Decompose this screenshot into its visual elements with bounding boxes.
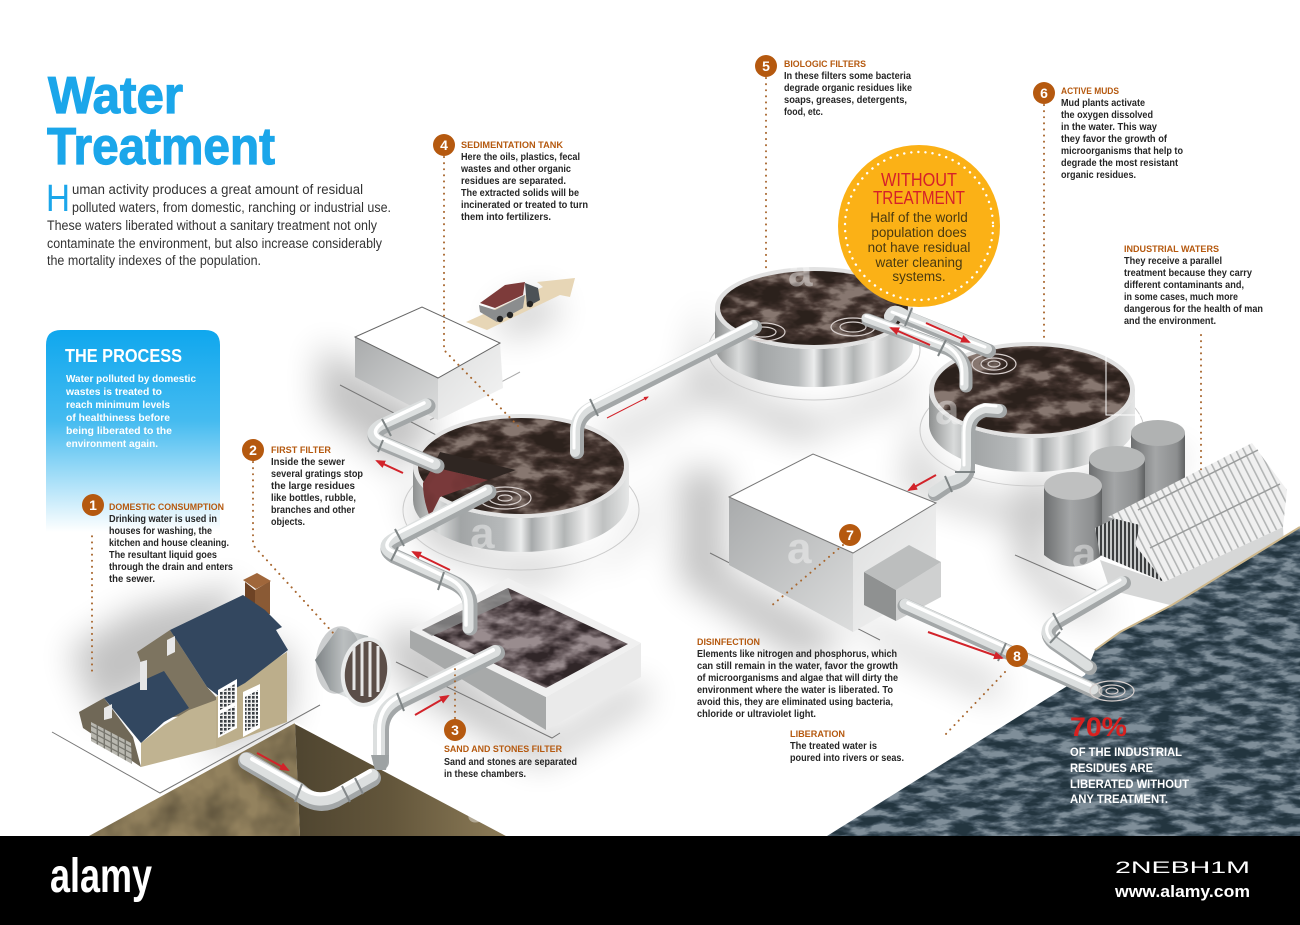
windows — [218, 679, 237, 738]
pipe: sludge extraction — [373, 403, 437, 466]
callout 1: domestic consumption — [82, 494, 233, 585]
callout: disinfection: can still remain in the water, favor the growth — [697, 661, 898, 672]
callout: industrial waters: in some cases, much more — [1124, 292, 1238, 303]
pipe: first tank to sand box — [386, 489, 489, 628]
callout 3: sand and stones filter: Sand and stones are separated — [444, 757, 577, 768]
callout: 70 percent statistic: LIBERATED WITHOUT — [1070, 777, 1190, 791]
callout: disinfection: Elements like nitrogen and phosphorus, which — [697, 649, 897, 660]
callout 6: active muds: ACTIVE MUDS — [1061, 86, 1119, 97]
callout 6: active muds: 6 — [1040, 85, 1048, 101]
callout 2: first filter: objects. — [271, 517, 305, 528]
main gable wall — [137, 630, 216, 747]
watermark letters: a — [787, 524, 812, 573]
callout: without treatment badge: TREATMENT — [873, 188, 965, 208]
callout: industrial waters: dangerous for the health of man — [1124, 304, 1263, 315]
callout 2: first filter — [242, 439, 363, 528]
callout 6: active muds — [1033, 82, 1183, 181]
flow arrows — [377, 323, 1002, 715]
callout 4: sedimentation tank: Here the oils, plastics, fecal — [461, 152, 580, 163]
callout: without treatment badge — [838, 145, 1000, 307]
callout 6: active muds: degrade the most resistant — [1061, 158, 1179, 169]
silos — [1044, 420, 1185, 566]
ground pit with underground pipe — [89, 723, 508, 836]
callout 1: domestic consumption: DOMESTIC CONSUMPTION — [109, 502, 224, 513]
panel: the process — [46, 330, 220, 532]
intro paragraph: the mortality indexes of the population. — [47, 253, 261, 268]
callout 4: sedimentation tank: residues are separated. — [461, 176, 566, 187]
sewer grating cylinder — [311, 623, 396, 710]
callout 2: first filter: several gratings stop — [271, 469, 363, 480]
callout 4: sedimentation tank: them into fertilizers. — [461, 212, 551, 223]
callout 2: first filter: FIRST FILTER — [271, 445, 331, 456]
callout 1: domestic consumption: kitchen and house cleaning. — [109, 538, 229, 549]
callout 2: first filter: like bottles, rubble, — [271, 493, 356, 504]
callout: industrial waters — [1124, 244, 1263, 327]
callout: disinfection: of microorganisms and algae that will dirty the — [697, 673, 898, 684]
pipe: outflow to river — [905, 603, 1095, 691]
callout 6: active muds: they favor the growth of — [1061, 134, 1168, 145]
chimney — [245, 582, 255, 622]
pipe: sedimentation to biologic — [574, 323, 755, 452]
callout 5: biologic filters: 5 — [762, 58, 770, 74]
title: Water — [48, 67, 183, 125]
callout 5: biologic filters: BIOLOGIC FILTERS — [784, 59, 866, 70]
callout: 70 percent statistic: RESIDUES ARE — [1070, 761, 1153, 775]
dotted leader lines — [92, 78, 1201, 735]
main front wall — [216, 652, 287, 748]
sand filter box — [410, 578, 641, 730]
intro paragraph: contaminate the environment, but also increase considerably — [47, 236, 382, 251]
callout: liberation: The treated water is — [790, 741, 877, 752]
panel: the process: Water polluted by domestic — [66, 374, 196, 385]
callout 6: active muds: the oxygen dissolved — [1061, 110, 1153, 121]
pipe: industrial to river — [1047, 580, 1124, 668]
callout: 70 percent statistic: ANY TREATMENT. — [1070, 792, 1168, 806]
callout: industrial waters: treatment because they carry — [1124, 268, 1252, 279]
callout 4: sedimentation tank — [433, 134, 588, 223]
disinfection building — [729, 454, 941, 632]
callout 1: domestic consumption: the sewer. — [109, 574, 155, 585]
soft ground shadows — [70, 290, 1190, 765]
panel: the process: of healthiness before — [66, 413, 170, 424]
callout 5: biologic filters: food, etc. — [784, 107, 823, 118]
callout: 70 percent statistic: 70% — [1070, 712, 1127, 742]
pipes — [371, 308, 1134, 770]
garage gable wall — [79, 698, 141, 767]
callout: without treatment badge: systems. — [892, 269, 946, 284]
main roof — [170, 595, 288, 697]
callout: liberation: poured into rivers or seas. — [790, 753, 904, 764]
watermark letters: a — [788, 247, 813, 296]
callout: industrial waters: different contaminants and, — [1124, 280, 1244, 291]
callout 2: first filter: branches and other — [271, 505, 355, 516]
house — [79, 573, 288, 767]
callout 1: domestic consumption: The resultant liquid goes — [109, 550, 217, 561]
callout 4: sedimentation tank: 4 — [440, 137, 448, 153]
panel: the process: environment again. — [66, 439, 158, 450]
pipe: sand box inlet — [371, 650, 497, 770]
callout 6: active muds: Mud plants activate — [1061, 98, 1145, 109]
sludge storage box — [355, 307, 503, 420]
callout: disinfection: environment where the water is liberated. To — [697, 685, 893, 696]
callout 6: active muds: microorganisms that help to — [1061, 146, 1183, 157]
callout: without treatment badge: population does — [871, 225, 967, 240]
callout 2: first filter: 2 — [249, 442, 257, 458]
callout: industrial waters: INDUSTRIAL WATERS — [1124, 244, 1219, 255]
pipes: biologic to active muds — [866, 308, 989, 386]
callout 3: sand and stones filter: 3 — [451, 722, 459, 738]
callout 4: sedimentation tank: wastes and other organic — [460, 164, 571, 175]
callout: liberation: LIBERATION — [790, 729, 845, 740]
intro paragraph: uman activity produces a great amount of residual — [72, 182, 363, 197]
callout: disinfection: DISINFECTION — [697, 637, 760, 648]
callout: disinfection: avoid this, they are eliminated using bacteria, — [697, 697, 893, 708]
callout 3: sand and stones filter: SAND AND STONES FILTER — [444, 744, 562, 755]
footer bar — [0, 836, 1300, 925]
footer bar: alamy — [50, 850, 152, 903]
callout: without treatment badge: not have residual — [868, 240, 970, 255]
watermark letters — [467, 247, 1097, 832]
footer bar: www.alamy.com — [1114, 882, 1250, 901]
callout 2: first filter: the large residues — [271, 481, 355, 492]
callout 5: biologic filters: degrade organic residues like — [784, 83, 912, 94]
watermark letters: a — [470, 509, 495, 558]
truck on recycling arrow — [466, 278, 575, 330]
callout 4: sedimentation tank: The extracted solids will be — [461, 188, 579, 199]
callout 1: domestic consumption: 1 — [89, 497, 97, 513]
callout: disinfection: chloride or ultraviolet light. — [697, 709, 816, 720]
callout 5: biologic filters — [755, 55, 912, 118]
callout 6: active muds: in the water. This way — [1061, 122, 1157, 133]
garage front wall — [141, 700, 216, 767]
callout 6: active muds: organic residues. — [1061, 170, 1136, 181]
intro paragraph: These waters liberated without a sanitary treatment not only — [47, 218, 377, 233]
arrow: sewer flow — [257, 753, 288, 770]
callout: disinfection — [697, 637, 898, 720]
watermark letters: a — [1072, 529, 1097, 578]
marker 8 — [1006, 645, 1028, 667]
callout: 70 percent statistic: OF THE INDUSTRIAL — [1070, 745, 1182, 759]
marker 8: 8 — [1013, 648, 1021, 664]
callout: without treatment badge: Half of the world — [870, 210, 968, 225]
marker 7: 7 — [846, 527, 854, 543]
callout 1: domestic consumption: Drinking water is used in — [109, 514, 217, 525]
watermark letters: a — [935, 385, 960, 434]
panel: the process: THE PROCESS — [65, 346, 182, 366]
intro paragraph — [46, 178, 391, 268]
biologic filter tank — [708, 267, 920, 400]
callout: industrial waters: and the environment. — [1124, 316, 1216, 327]
pipe: active muds to disinfection — [933, 405, 1000, 494]
callout: without treatment badge: water cleaning — [874, 255, 963, 270]
callout 3: sand and stones filter — [444, 719, 577, 780]
callout 2: first filter: Inside the sewer — [271, 457, 345, 468]
callout 3: sand and stones filter: in these chambers. — [444, 769, 526, 780]
callout 5: biologic filters: soaps, greases, detergents, — [784, 95, 907, 106]
title — [47, 67, 275, 176]
garage roof — [104, 671, 189, 743]
intro paragraph: H — [46, 178, 70, 220]
callout 4: sedimentation tank: SEDIMENTATION TANK — [461, 140, 563, 151]
callout 5: biologic filters: In these filters some bacteria — [784, 71, 911, 82]
active mud tank — [920, 342, 1145, 486]
callout: liberation — [790, 729, 904, 764]
marker 7 — [839, 524, 861, 546]
footer bar: 2NEBH1M — [1115, 858, 1250, 877]
panel: the process: being liberated to the — [66, 426, 172, 437]
intro paragraph: polluted waters, from domestic, ranching or industrial use. — [72, 200, 391, 215]
industrial building — [1095, 443, 1287, 605]
callout: 70 percent statistic — [1070, 712, 1190, 806]
callout: industrial waters: They receive a parallel — [1124, 256, 1222, 267]
sedimentation tank — [403, 414, 639, 570]
callout 1: domestic consumption: houses for washing, the — [109, 526, 212, 537]
panel: the process: wastes is treated to — [65, 387, 162, 398]
title: Treatment — [47, 118, 275, 176]
river water — [827, 527, 1300, 836]
callout 1: domestic consumption: through the drain and enters — [109, 562, 233, 573]
plot outlines on the ground — [52, 372, 1100, 793]
callout 4: sedimentation tank: incinerated or treated to turn — [461, 200, 588, 211]
panel: the process: reach minimum levels — [66, 400, 170, 411]
callout: without treatment badge: WITHOUT — [881, 170, 957, 190]
watermark letters: a — [467, 783, 492, 832]
